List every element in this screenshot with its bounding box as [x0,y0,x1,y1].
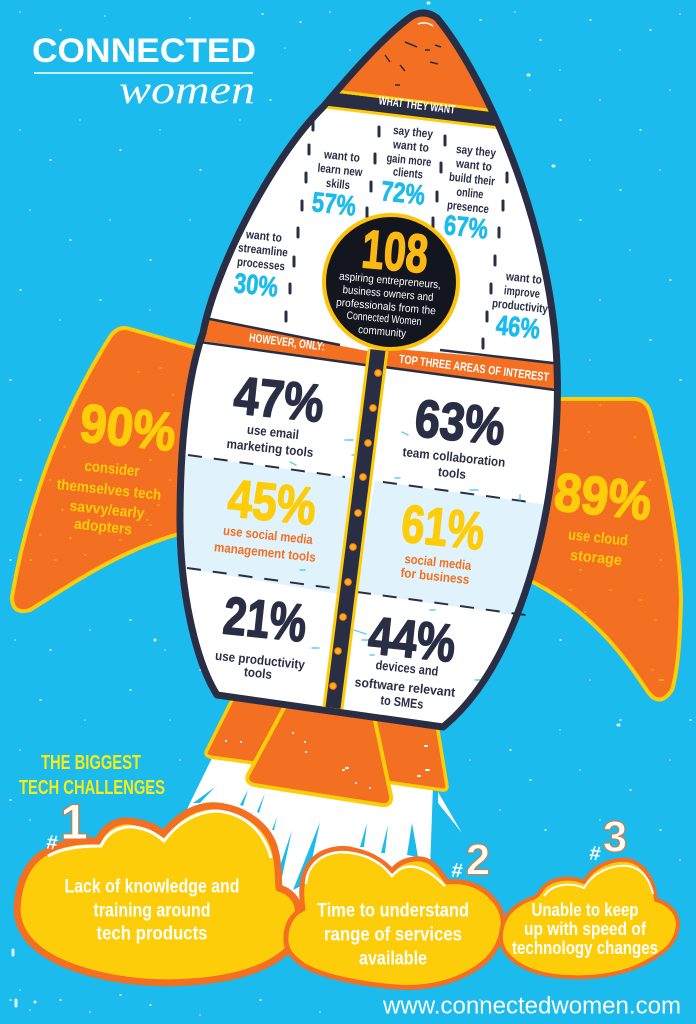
stat: productivity: 21% [221,586,309,654]
want: streamline processes: want to [245,227,283,245]
want: build online presence: build their [448,170,496,188]
fin speckles [565,405,663,680]
nozzle: left [206,698,292,763]
right column stats [354,389,508,712]
cloud text: up with speed of [524,919,647,939]
cloud text: range of services [324,924,462,946]
fin label: storage [569,547,623,569]
rank number [450,836,490,884]
badge text [336,271,441,340]
cloud highlight [544,866,653,896]
stat: 57%: 57% [311,186,358,222]
cloud text [64,876,240,944]
website url: www.connectedwomen.com [382,992,681,1020]
stat: email marketing: marketing tools [226,436,314,460]
cloud text: Time to understand [317,900,469,922]
cloud 1 [17,794,298,983]
badge text: Connected Women [346,310,422,328]
nozzle: centre [247,706,391,805]
stat: team collaboration [402,389,508,482]
stat: email marketing [226,366,327,460]
stat: social media for business: social media [404,551,473,573]
stat: 72%: 72% [380,175,427,211]
cloud text [512,900,658,958]
heading: biggest tech challenges [19,752,165,799]
cloud shape [17,806,298,983]
fin speckles [30,368,173,560]
want: improve productivity: productivity [491,296,549,316]
row dividers [187,455,537,616]
rank number [588,812,627,866]
heading: biggest tech challenges: TECH CHALLENGES [19,777,165,799]
stat: devices and software: 44% [366,606,458,674]
logo [32,32,256,112]
stat: productivity [214,586,309,682]
nozzle speckles [226,733,429,788]
want: build online presence: online [456,185,484,201]
rocket body [170,0,570,727]
want: build online presence: say they [455,142,497,160]
badge number: 108 [360,219,430,285]
cloud highlight [48,811,271,858]
want: streamline processes: processes [236,255,286,273]
nozzle: right [370,716,447,790]
left column stats [213,366,327,682]
rank number: 3 [603,812,627,862]
fin label [56,458,162,538]
central pole [330,350,381,708]
stat: 30%: 30% [233,267,280,303]
want: gain more clients [380,123,434,211]
fin label: themselves tech [56,476,162,504]
fin shape [525,399,681,700]
fin label: consider [84,458,140,480]
stat: team collaboration: team collaboration [402,444,506,470]
stat: devices and software [354,606,458,712]
badge text: community [358,324,407,340]
heading: what they want: WHAT THEY WANT [378,93,457,117]
want: gain more clients: say they [392,123,434,141]
stat: email marketing: use email [246,422,300,442]
want: learn new skills: skills [325,176,351,192]
stat: social media management: 45% [225,469,319,537]
rank number: # [45,831,59,855]
stat: email marketing: 47% [231,366,327,434]
stat: social media management [213,469,319,565]
want: improve productivity: improve [503,283,541,301]
heading: biggest tech challenges: THE BIGGEST [41,752,141,774]
stat: devices and software: software relevant [354,674,457,700]
want: gain more clients: gain more [386,151,432,169]
rank number: # [588,842,602,866]
stat: 46%: 46% [495,309,542,345]
logo wordmark: connected: CONNECTED [32,32,256,70]
heading: however only: HOWEVER, ONLY: [248,330,326,354]
cloud text: training around [94,900,210,922]
want: streamline processes: streamline [237,240,289,260]
badge text: professionals from the [336,297,436,317]
stat: productivity: use productivity [214,648,306,672]
fin stat: 89%: 89% [552,462,654,532]
left fin [12,328,197,611]
fin label [567,526,629,569]
cloud text: available [359,948,427,970]
logo divider [34,72,253,74]
light blue row: left [184,455,352,594]
heading: top three areas: TOP THREE AREAS OF INTEREST [398,352,550,384]
exhaust flame spike [438,792,462,833]
cloud text: Lack of knowledge and [64,876,240,898]
cloud 3 [501,812,678,977]
rank number: # [450,859,464,883]
pole shaft [333,350,378,708]
want: streamline processes [233,227,289,303]
badge text: aspiring entrepreneurs, [339,271,441,291]
want: improve productivity: want to [505,269,543,287]
nose cone [340,16,488,110]
want: build online presence [443,142,497,245]
stat: team collaboration: tools [437,464,467,482]
stat: 67%: 67% [443,209,490,245]
light blue row: right [358,481,544,615]
fin label: adopters [73,516,133,538]
cloud shape [286,848,503,987]
rocket exhaust flames [170,756,433,900]
speckles on panels [230,430,520,680]
body outline [180,13,557,727]
want: gain more clients: clients [392,164,424,182]
body colour sections [184,16,554,615]
cloud text: Unable to keep [532,900,639,920]
want: gain more clients: want to [392,137,430,155]
want: learn new skills [311,147,364,222]
cloud 2 [286,836,503,987]
stat: social media management: management tools [213,539,317,565]
cloud highlight [306,852,445,886]
rank number: 1 [60,794,88,850]
stat: social media for business [399,494,487,587]
what they want band [328,93,496,126]
cloud text: tech products [96,924,208,944]
exhaust flame cut-outs [193,787,418,890]
want: learn new skills: learn new [317,161,364,179]
want: learn new skills: want to [323,147,361,165]
logo wordmark: women: women [119,67,255,112]
section band: left [204,320,368,364]
fin label: savvy/early [69,498,146,522]
want: build online presence: presence [446,198,490,216]
badge circle [324,215,458,349]
right fin [525,399,681,700]
fin label: use cloud [567,526,629,550]
stat: social media management: use social media [222,523,314,547]
cloud text: technology changes [512,938,658,958]
stat: social media for business: for business [400,565,470,587]
section band: right [384,350,554,388]
stat: productivity: tools [243,664,273,682]
nose scratches [385,42,441,85]
fin stat: 90%: 90% [77,393,179,463]
cloud shape [501,860,678,977]
central badge [324,215,458,349]
body fill [180,13,557,727]
stat: devices and software: devices and [375,657,439,679]
stat: team collaboration: 63% [412,389,508,457]
want: improve productivity [491,269,549,345]
rocket nozzles [206,698,447,805]
want: build online presence: want to [455,156,493,174]
rank number: 2 [466,836,490,884]
rank number [45,794,88,855]
cloud text [317,900,469,970]
stat: devices and software: to SMEs [380,692,424,712]
pole lights [330,370,381,689]
stat: social media for business: 61% [399,494,487,562]
dashed separators [286,122,510,348]
nose highlight [418,23,433,26]
badge text: business owners and [342,284,434,304]
fin shape [12,328,197,611]
